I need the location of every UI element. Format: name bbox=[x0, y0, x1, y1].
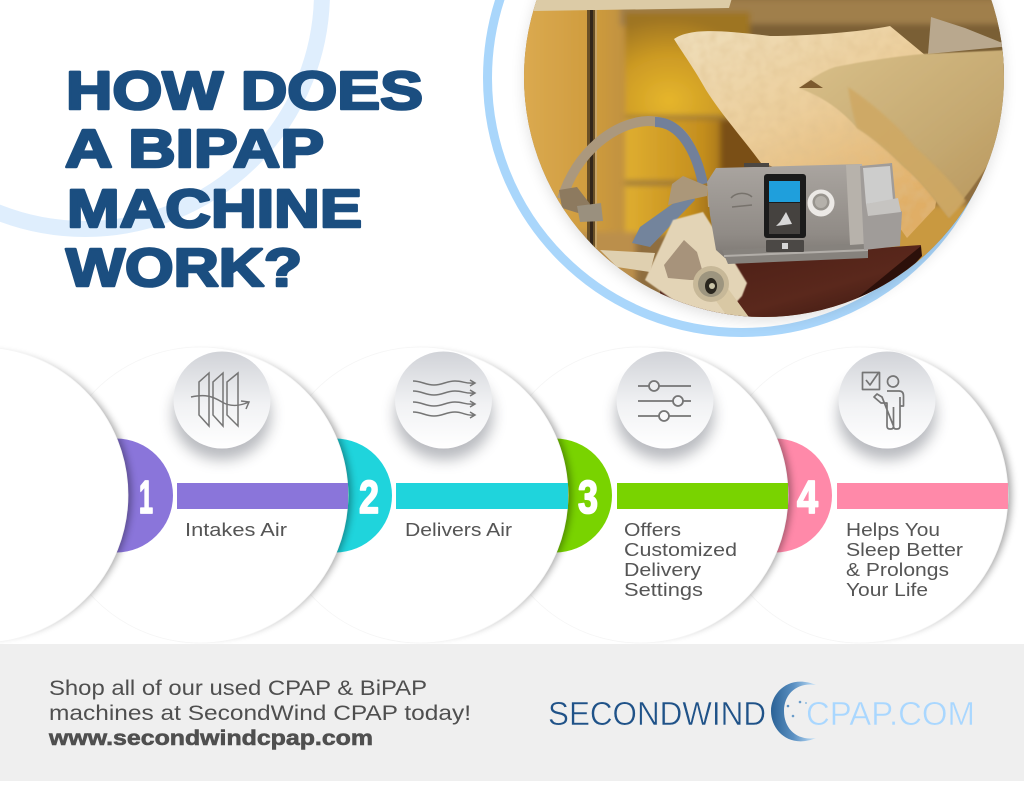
step labels: Customized bbox=[624, 539, 737, 560]
step numbers bbox=[139, 471, 818, 523]
footer text: machines at SecondWind CPAP today! bbox=[49, 702, 471, 725]
BiPAP machine bbox=[707, 164, 864, 258]
pillow hem band bbox=[848, 87, 966, 218]
logo bbox=[548, 682, 975, 741]
step numbers: 2 bbox=[359, 471, 379, 523]
icon: air waves bbox=[395, 352, 493, 460]
step labels bbox=[185, 519, 963, 600]
step labels: Intakes Air bbox=[185, 519, 287, 540]
step numbers: 1 bbox=[139, 471, 153, 523]
bedside table bbox=[660, 245, 921, 322]
back pillow bbox=[928, 17, 1010, 54]
title: A BIPAP bbox=[65, 119, 324, 179]
headgear straps bbox=[562, 121, 688, 199]
step labels: Offers bbox=[624, 519, 681, 540]
step labels: Sleep Better bbox=[846, 539, 963, 560]
pillow corner shadow bbox=[799, 80, 823, 88]
step labels: Your Life bbox=[846, 579, 928, 600]
footer text: Shop all of our used CPAP & BiPAP bbox=[49, 677, 427, 700]
step 1 panel bbox=[52, 347, 351, 643]
step labels: Delivers Air bbox=[405, 519, 512, 540]
machine screen bbox=[764, 174, 806, 238]
lampshade bbox=[530, 0, 732, 11]
logo: SECONDWIND bbox=[548, 695, 766, 732]
footer band bbox=[0, 644, 1024, 781]
title bbox=[65, 61, 423, 298]
main pillow bbox=[674, 26, 950, 238]
machine logo bbox=[731, 193, 752, 207]
step labels: Helps You bbox=[846, 519, 940, 540]
step 4 panel bbox=[712, 347, 1011, 643]
machine humidifier bbox=[860, 163, 902, 250]
footer text bbox=[48, 677, 471, 750]
photo ring bbox=[488, 0, 996, 332]
lamp pole bbox=[587, 10, 596, 248]
step labels: & Prolongs bbox=[846, 559, 949, 580]
machine dial bbox=[808, 190, 834, 216]
step labels: Delivery bbox=[624, 559, 702, 580]
logo: CPAP.COM bbox=[806, 695, 975, 732]
title: WORK? bbox=[66, 238, 302, 298]
title: MACHINE bbox=[67, 179, 362, 239]
photo: BiPAP machine on a bedside table bbox=[515, 0, 1020, 325]
mask cushion bbox=[645, 212, 747, 318]
background arc bbox=[0, 0, 322, 229]
icon: settings sliders bbox=[616, 352, 714, 460]
step 3 panel bbox=[492, 347, 791, 643]
footer text: www.secondwindcpap.com bbox=[48, 727, 373, 750]
step numbers: 3 bbox=[578, 471, 598, 523]
front pillow bbox=[799, 50, 1010, 218]
title: HOW DOES bbox=[66, 61, 423, 121]
step numbers: 4 bbox=[797, 471, 818, 523]
icon: air intake filters bbox=[173, 352, 271, 460]
first white circle bbox=[0, 347, 131, 643]
step labels: Settings bbox=[624, 579, 703, 600]
step 2 panel bbox=[272, 347, 571, 643]
icon: person with checklist bbox=[838, 352, 936, 460]
